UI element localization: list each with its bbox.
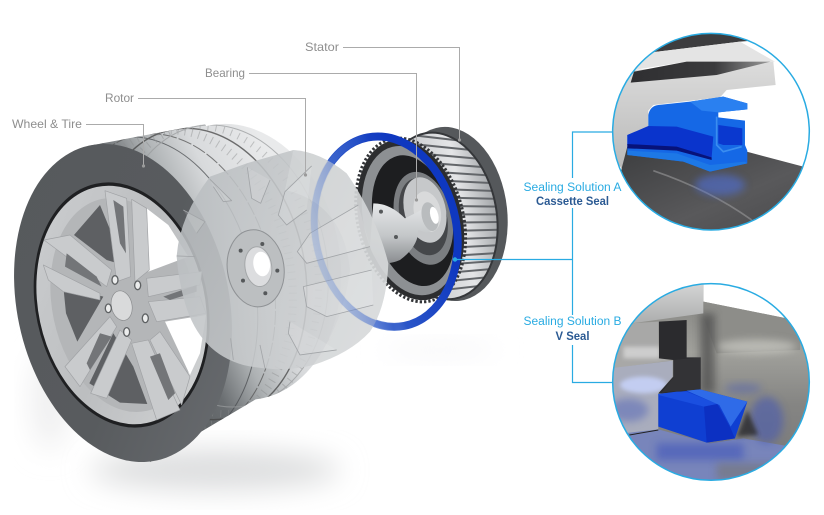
stator front face <box>339 126 482 314</box>
lug nuts <box>105 276 148 336</box>
label: Wheel and Tire: Wheel & Tire <box>12 117 82 131</box>
text: Sealing Solution B: Sealing Solution B <box>524 316 622 328</box>
text: Sealing Solution B: V Seal <box>556 331 590 343</box>
shaft <box>370 200 441 263</box>
see-through gaps <box>147 208 206 375</box>
label: Stator: Stator <box>305 40 339 54</box>
label: Bearing <box>205 66 418 202</box>
rotor drum <box>177 150 388 369</box>
label: Bearing: Bearing <box>205 66 245 80</box>
center cap <box>108 289 135 322</box>
alloy rim <box>12 166 232 444</box>
spoke shading <box>65 200 197 400</box>
text: Sealing Solution A <box>524 182 622 208</box>
floor surface <box>621 146 802 230</box>
ground shadow <box>32 342 500 490</box>
text: Sealing Solution A: Sealing Solution A <box>524 182 622 194</box>
rotor hub <box>222 226 289 311</box>
floor <box>628 430 785 480</box>
detail circle B: V seal <box>608 280 813 487</box>
dark gaps <box>63 205 147 404</box>
stator back housing <box>384 121 516 307</box>
label: Rotor <box>105 91 307 177</box>
spokes <box>43 191 206 420</box>
ring seen through rotor <box>298 124 474 339</box>
rotor pockets <box>177 166 373 368</box>
housing top <box>654 34 748 52</box>
bearing <box>384 166 462 271</box>
text: Sealing Solution B <box>524 316 622 343</box>
stator, bearing and shaft assembly <box>354 126 508 304</box>
upper silver housing <box>634 284 704 323</box>
V seal <box>658 389 747 443</box>
detail circle A: cassette seal <box>610 30 813 233</box>
silver housing <box>610 62 776 168</box>
tire body <box>88 124 328 462</box>
black rubber stem <box>658 320 701 393</box>
text: Sealing Solution A: Cassette Seal <box>536 196 609 208</box>
callout connector lines <box>453 132 612 382</box>
rotor <box>177 124 474 369</box>
label: Rotor: Rotor <box>105 91 134 105</box>
seal body <box>627 97 747 172</box>
tire sidewall <box>0 123 260 483</box>
stator teeth cylinder <box>408 132 499 300</box>
blue seal ring <box>298 124 474 339</box>
label: Wheel and Tire <box>12 117 145 168</box>
label: Stator <box>305 40 461 142</box>
wheel and tire <box>14 124 328 462</box>
